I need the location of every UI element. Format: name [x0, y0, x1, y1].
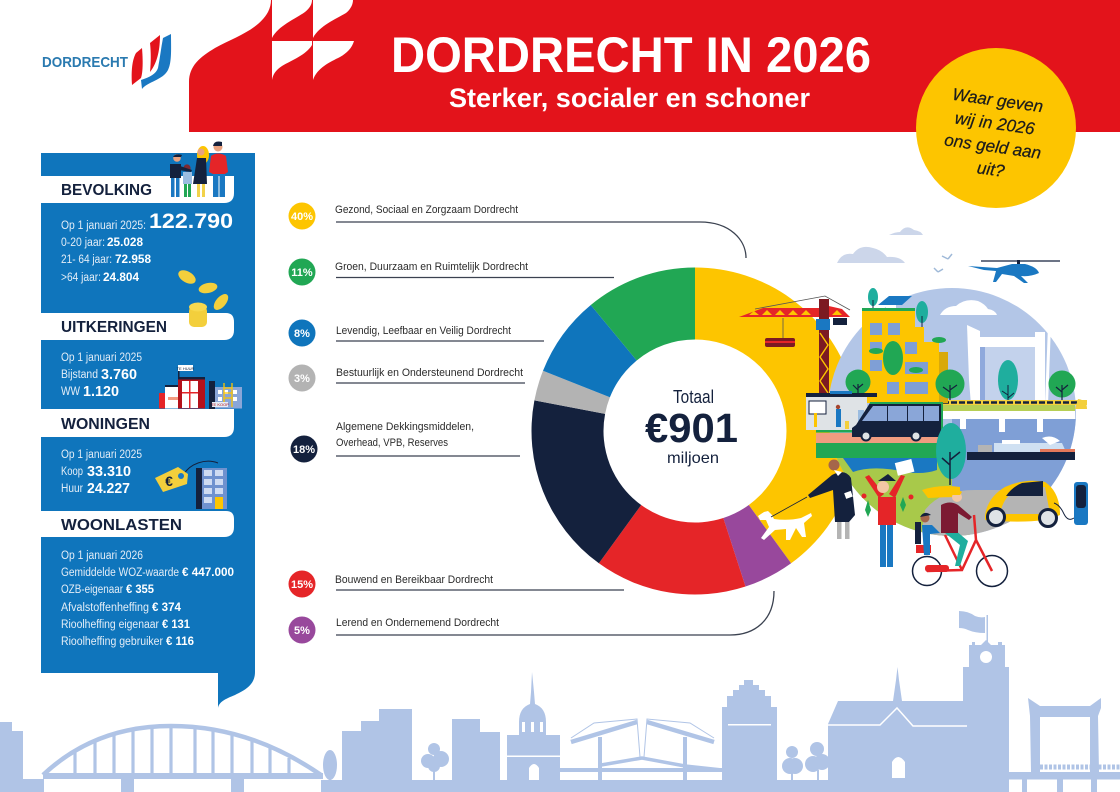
legend: bouwend 15% [288, 570, 624, 598]
left street buildings [321, 709, 1009, 792]
housing figures: Koop [61, 466, 83, 478]
legend: gezond 40%: 40% [291, 211, 313, 223]
gate bridge [967, 325, 1051, 405]
housing figures [61, 449, 142, 497]
population figures: 72.958 [115, 252, 151, 266]
white cloud [940, 300, 997, 315]
subtitle: Sterker, socialer en schoner [449, 83, 810, 113]
housing costs figures: € 374 [152, 600, 181, 614]
benefits figures: 1.120 [83, 383, 119, 400]
drawbridge [560, 719, 722, 780]
housing costs figures: € 447.000 [182, 565, 234, 579]
housing costs figures: € 116 [166, 634, 194, 648]
housing costs figures: Rioolheffing eigenaar [61, 619, 159, 631]
legend: algemene 18%: Algemene Dekkingsmiddelen, [336, 421, 474, 433]
population figures: Op 1 januari 2025: [61, 220, 146, 232]
drone [968, 260, 1060, 283]
legend: bestuurlijk 3%: 3% [294, 373, 310, 385]
person on bicycle with child [912, 486, 1008, 586]
icon: price tag and apartment: € [165, 473, 173, 489]
arch bridge [0, 722, 323, 792]
legend: bouwend 15%: 15% [291, 579, 313, 591]
heading: woonlasten: WOONLASTEN [61, 517, 182, 534]
housing figures: 24.227 [87, 480, 130, 497]
legend: groen 11%: 11% [291, 267, 313, 279]
header banner [189, 0, 1120, 132]
housing costs figures: € 131 [162, 617, 190, 631]
gate bridge silhouette [1009, 698, 1120, 792]
panel: city statistics [41, 142, 255, 708]
legend: levendig 8%: Levendig, Leefbaar en Veilig Dordrecht [336, 325, 511, 337]
illustration: sustainable city [739, 227, 1088, 586]
donut centre total [645, 387, 738, 467]
population figures: >64 jaar: [61, 272, 101, 284]
green rail strip and viaduct [943, 405, 1075, 432]
legend: gezond 40% [288, 202, 746, 258]
domed tower [507, 672, 560, 781]
icon: coins [176, 267, 231, 327]
housing costs figures: Gemiddelde WOZ-waarde [61, 567, 179, 579]
church and town hall tower [828, 611, 1009, 792]
housing costs figures: OZB-eigenaar [61, 584, 123, 596]
callout: question badge [916, 48, 1076, 208]
population figures [61, 210, 233, 284]
population figures: 24.804 [103, 270, 139, 284]
person with dog [758, 460, 855, 540]
legend: levendig 8% [288, 320, 544, 346]
population figures: 0-20 jaar: [61, 237, 105, 249]
green trees [846, 370, 1076, 400]
housing costs figures: Op 1 januari 2026 [61, 550, 143, 562]
teal tree [936, 423, 966, 485]
benefits figures [61, 352, 142, 400]
bus [852, 403, 942, 440]
icon: family [170, 142, 228, 197]
legend: algemene 18% [290, 421, 520, 462]
callout: question badge: uit? [976, 158, 1006, 181]
donut centre total: €901 [645, 405, 738, 451]
teal tree in gate [998, 360, 1018, 407]
stepped gable [722, 680, 830, 781]
benefits figures: Op 1 januari 2025 [61, 352, 142, 364]
legend: algemene 18%: 18% [293, 444, 315, 456]
skyline: city silhouette [0, 611, 1120, 792]
road and grass [816, 433, 938, 473]
logo: DORDRECHT [42, 54, 128, 71]
population figures: 122.790 [149, 210, 233, 233]
heading: uitkeringen: UITKERINGEN [61, 319, 167, 336]
crane [739, 296, 850, 395]
person with diploma [862, 459, 914, 567]
population figures: 25.028 [107, 235, 143, 249]
legend: bouwend 15%: Bouwend en Bereikbaar Dordrecht [335, 574, 493, 586]
housing figures: Huur [61, 483, 83, 495]
icon: price tag and apartment [155, 461, 227, 509]
legend: groen 11% [288, 258, 614, 286]
legend: lerend 5%: Lerend en Ondernemend Dordrecht [336, 617, 499, 629]
housing costs figures: Afvalstoffenheffing [61, 602, 149, 614]
logo [42, 34, 171, 89]
housing costs figures: Rioolheffing gebruiker [61, 636, 163, 648]
donut centre total: miljoen [667, 450, 719, 467]
donut chart: budget split [532, 267, 859, 595]
globe ground layers [836, 419, 1076, 536]
heading: bevolking: BEVOLKING [61, 182, 152, 199]
population figures: 21- 64 jaar: [61, 254, 112, 266]
housing costs figures [61, 550, 234, 648]
legend: algemene 18%: Overhead, VPB, Reserves [336, 437, 448, 449]
housing figures: 33.310 [87, 463, 131, 480]
housing costs figures: € 355 [126, 582, 154, 596]
bus shelter [806, 391, 877, 432]
benefits figures: WW [61, 386, 80, 398]
train [927, 399, 1087, 409]
heading: woningen: WONINGEN [61, 416, 150, 433]
clouds and birds [837, 227, 952, 272]
electric car and charger [985, 481, 1088, 526]
globe backdrop [828, 288, 1076, 536]
apartment building [862, 288, 948, 403]
legend: levendig 8%: 8% [294, 328, 310, 340]
benefits figures: Bijstand [61, 369, 98, 381]
housing figures: Op 1 januari 2025 [61, 449, 142, 461]
title: DORDRECHT IN 2026 [391, 27, 871, 83]
boat [967, 437, 1075, 460]
callout: question badge: wij in 2026 [954, 109, 1036, 139]
legend: lerend 5% [288, 591, 774, 644]
legend: groen 11%: Groen, Duurzaam en Ruimtelijk Dordrecht [335, 261, 528, 273]
legend: lerend 5%: 5% [294, 625, 310, 637]
benefits figures: 3.760 [101, 366, 137, 383]
icon: houses [159, 365, 242, 409]
legend: bestuurlijk 3%: Bestuurlijk en Ondersteunend Dordrecht [336, 367, 523, 379]
callout: question badge: Waar geven [951, 85, 1044, 116]
legend: gezond 40%: Gezond, Sociaal en Zorgzaam Dordrecht [335, 204, 518, 216]
donut centre total: Totaal [673, 387, 714, 407]
callout: question badge: ons geld aan [943, 130, 1042, 163]
legend: bestuurlijk 3% [288, 364, 525, 392]
icon: houses: TE HUUR [177, 366, 194, 371]
icon: houses: TE KOOP [211, 402, 229, 407]
